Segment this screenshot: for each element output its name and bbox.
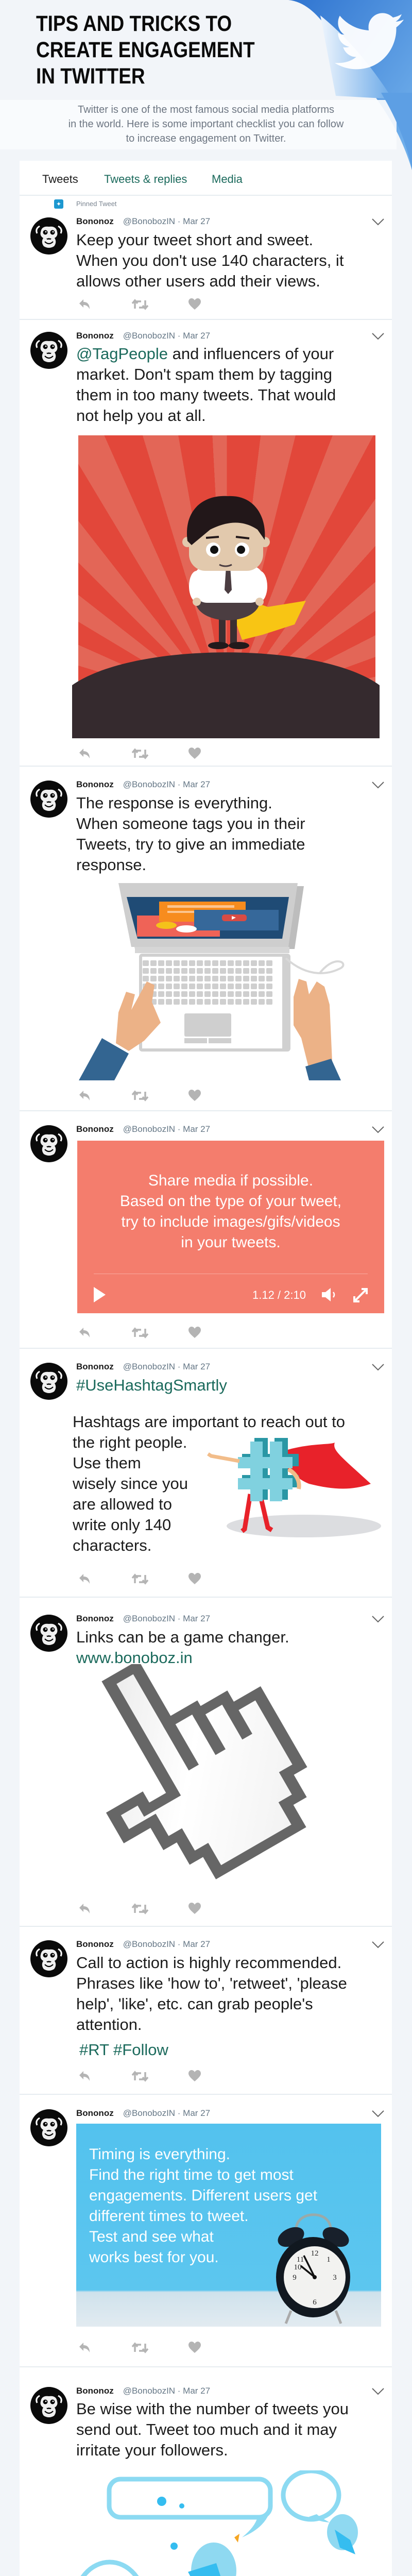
tweet text — [76, 1953, 347, 2035]
chevron — [372, 1364, 384, 1370]
pinned tweet label — [54, 199, 117, 209]
hashtag paragraph: characters. — [73, 1536, 151, 1554]
tweet text: response. — [76, 856, 146, 874]
timing text: different times to tweet. — [89, 2208, 249, 2225]
illustration: superhero businessman on sunburst — [72, 435, 380, 738]
name row: Bononoz @BonobozIN · Mar 27 — [76, 1124, 210, 1134]
tweet text: Be wise with the number of tweets you — [76, 2400, 349, 2418]
tweet text: Call to action is highly recommended. — [76, 1954, 341, 1972]
name row: Bononoz @BonobozIN · Mar 27 — [76, 1939, 210, 1949]
title: TIPS AND TRICKS TO — [36, 11, 232, 36]
avatar — [30, 1125, 67, 1162]
alarm clock: 1 — [327, 2256, 331, 2264]
tweet text: attention. — [76, 2015, 142, 2033]
video controls: 1.12 / 2:10 — [252, 1289, 306, 1301]
avatar — [30, 1363, 67, 1400]
avatar — [30, 2109, 67, 2147]
hashtag paragraph — [73, 1413, 345, 1554]
actions — [79, 1573, 201, 1585]
avatar — [30, 217, 67, 255]
tweet text: send out. Tweet too much and it may — [76, 2420, 337, 2438]
hashtag paragraph: Hashtags are important to reach out to — [73, 1413, 345, 1431]
tweet text: Phrases like 'how to', 'retweet', 'please — [76, 1974, 347, 1992]
actions — [77, 2341, 203, 2354]
hashtag paragraph: the right people. — [73, 1433, 187, 1451]
pinned tweet label: Pinned Tweet — [76, 200, 117, 208]
name row: Bononoz @BonobozIN · Mar 27 — [76, 779, 210, 789]
hashtag paragraph: write only 140 — [73, 1516, 171, 1534]
tweet text — [76, 345, 336, 425]
video text: try to include images/gifs/videos — [121, 1213, 340, 1230]
tabs: Tweets — [42, 173, 78, 185]
tweet text: Keep your tweet short and sweet. — [76, 231, 313, 249]
name row: Bononoz @BonobozIN · Mar 27 — [76, 2108, 210, 2118]
alarm clock: 10 — [294, 2263, 302, 2272]
illustration: hashtag superhero — [207, 1438, 381, 1537]
illustration: laptop with hands — [79, 883, 344, 1080]
intro text band: Twitter is one of the most famous social media platforms — [78, 104, 334, 115]
actions — [79, 298, 201, 310]
name row: Bononoz @BonobozIN · Mar 27 — [76, 1614, 210, 1623]
tweet text — [76, 2399, 349, 2461]
tweet text — [76, 794, 305, 874]
timing text: engagements. Different users get — [89, 2187, 317, 2204]
chevron — [372, 1616, 384, 1623]
timing text: works best for you. — [89, 2249, 219, 2266]
title — [36, 11, 255, 89]
chevron — [371, 1941, 385, 1949]
blue curl lower edge over band — [381, 93, 412, 170]
name row: Bononoz @BonobozIN · Mar 27 — [76, 1362, 210, 1371]
chevron — [372, 218, 384, 226]
hashtag paragraph: Use them — [73, 1454, 141, 1472]
timing text — [89, 2144, 317, 2268]
actions — [79, 1090, 201, 1101]
alarm clock: 3 — [333, 2274, 337, 2282]
tweet text: them in too many tweets. That would — [76, 386, 336, 404]
tabs: Media — [212, 173, 243, 185]
tweet text: Links can be a game changer. — [76, 1628, 289, 1646]
pinned tweet label: ✦ — [56, 200, 61, 208]
hashtag paragraph: wisely since you — [73, 1475, 188, 1493]
tweet text: The response is everything. — [76, 794, 272, 812]
tweet text: @TagPeople and influencers of your — [76, 345, 334, 363]
tweet text: When someone tags you in their — [76, 815, 305, 833]
name row: Bononoz @BonobozIN · Mar 27 — [76, 331, 210, 341]
tabs: Tweets & replies — [104, 173, 187, 185]
avatar — [30, 332, 67, 369]
timing image card — [76, 2124, 381, 2327]
video controls — [94, 1287, 368, 1302]
illustration: birds and speech bubbles — [72, 2470, 381, 2576]
name row: Bononoz @BonobozIN · Mar 27 — [76, 216, 210, 226]
tweet text — [76, 1628, 289, 1667]
intro text band — [0, 100, 397, 149]
chevron — [371, 2387, 385, 2396]
tweet text: irritate your followers. — [76, 2441, 228, 2459]
title: IN TWITTER — [36, 64, 145, 89]
tweet text: allows other users add their views. — [76, 272, 320, 290]
tweet text: market. Don't spam them by tagging — [76, 365, 332, 383]
header page curl with twitter bird — [288, 0, 412, 170]
video text: Based on the type of your tweet, — [120, 1193, 341, 1210]
actions — [79, 748, 201, 759]
alarm clock — [272, 2209, 359, 2327]
avatar — [30, 1940, 67, 1978]
tweet text: not help you at all. — [76, 406, 206, 425]
actions — [77, 1902, 203, 1915]
video text: Share media if possible. — [148, 1172, 313, 1189]
actions — [77, 2069, 203, 2082]
avatar — [30, 2386, 67, 2425]
tweet text — [76, 231, 344, 290]
tweet text: www.bonoboz.in — [76, 1649, 193, 1667]
illustration: pixel hand cursor — [101, 1664, 307, 1879]
video card: share media — [77, 1141, 384, 1313]
title: CREATE ENGAGEMENT — [36, 38, 255, 62]
timing text: Find the right time to get most — [89, 2166, 294, 2183]
chevron — [372, 782, 384, 788]
timing text: Test and see what — [89, 2228, 214, 2245]
alarm clock: 12 — [311, 2249, 318, 2258]
hashtags: #RT #Follow — [79, 2041, 168, 2059]
intro text band: to increase engagement on Twitter. — [126, 133, 286, 144]
alarm clock: 9 — [293, 2274, 297, 2282]
name row: Bononoz @BonobozIN · Mar 27 — [76, 2386, 210, 2396]
tweet text: When you don't use 140 characters, it — [76, 251, 344, 269]
tweet text: Tweets, try to give an immediate — [76, 835, 305, 853]
chevron — [372, 333, 384, 340]
avatar — [30, 1615, 67, 1652]
alarm clock: 6 — [313, 2298, 317, 2307]
alarm clock: 11 — [297, 2256, 304, 2264]
tweet 1 — [54, 199, 117, 209]
video text — [120, 1172, 341, 1251]
chevron — [372, 1126, 384, 1133]
tweet text: help', 'like', etc. can grab people's — [76, 1995, 313, 2013]
tabs — [42, 173, 243, 185]
timing text: Timing is everything. — [89, 2146, 230, 2163]
video text: in your tweets. — [181, 1234, 281, 1251]
hashtag heading: #UseHashtagSmartly — [76, 1376, 227, 1394]
actions — [79, 1327, 201, 1338]
chevron — [371, 2110, 385, 2118]
avatar — [30, 781, 67, 818]
intro text band: in the world. Here is some important checklist you can follow — [68, 118, 344, 130]
hashtag paragraph: are allowed to — [73, 1495, 172, 1513]
